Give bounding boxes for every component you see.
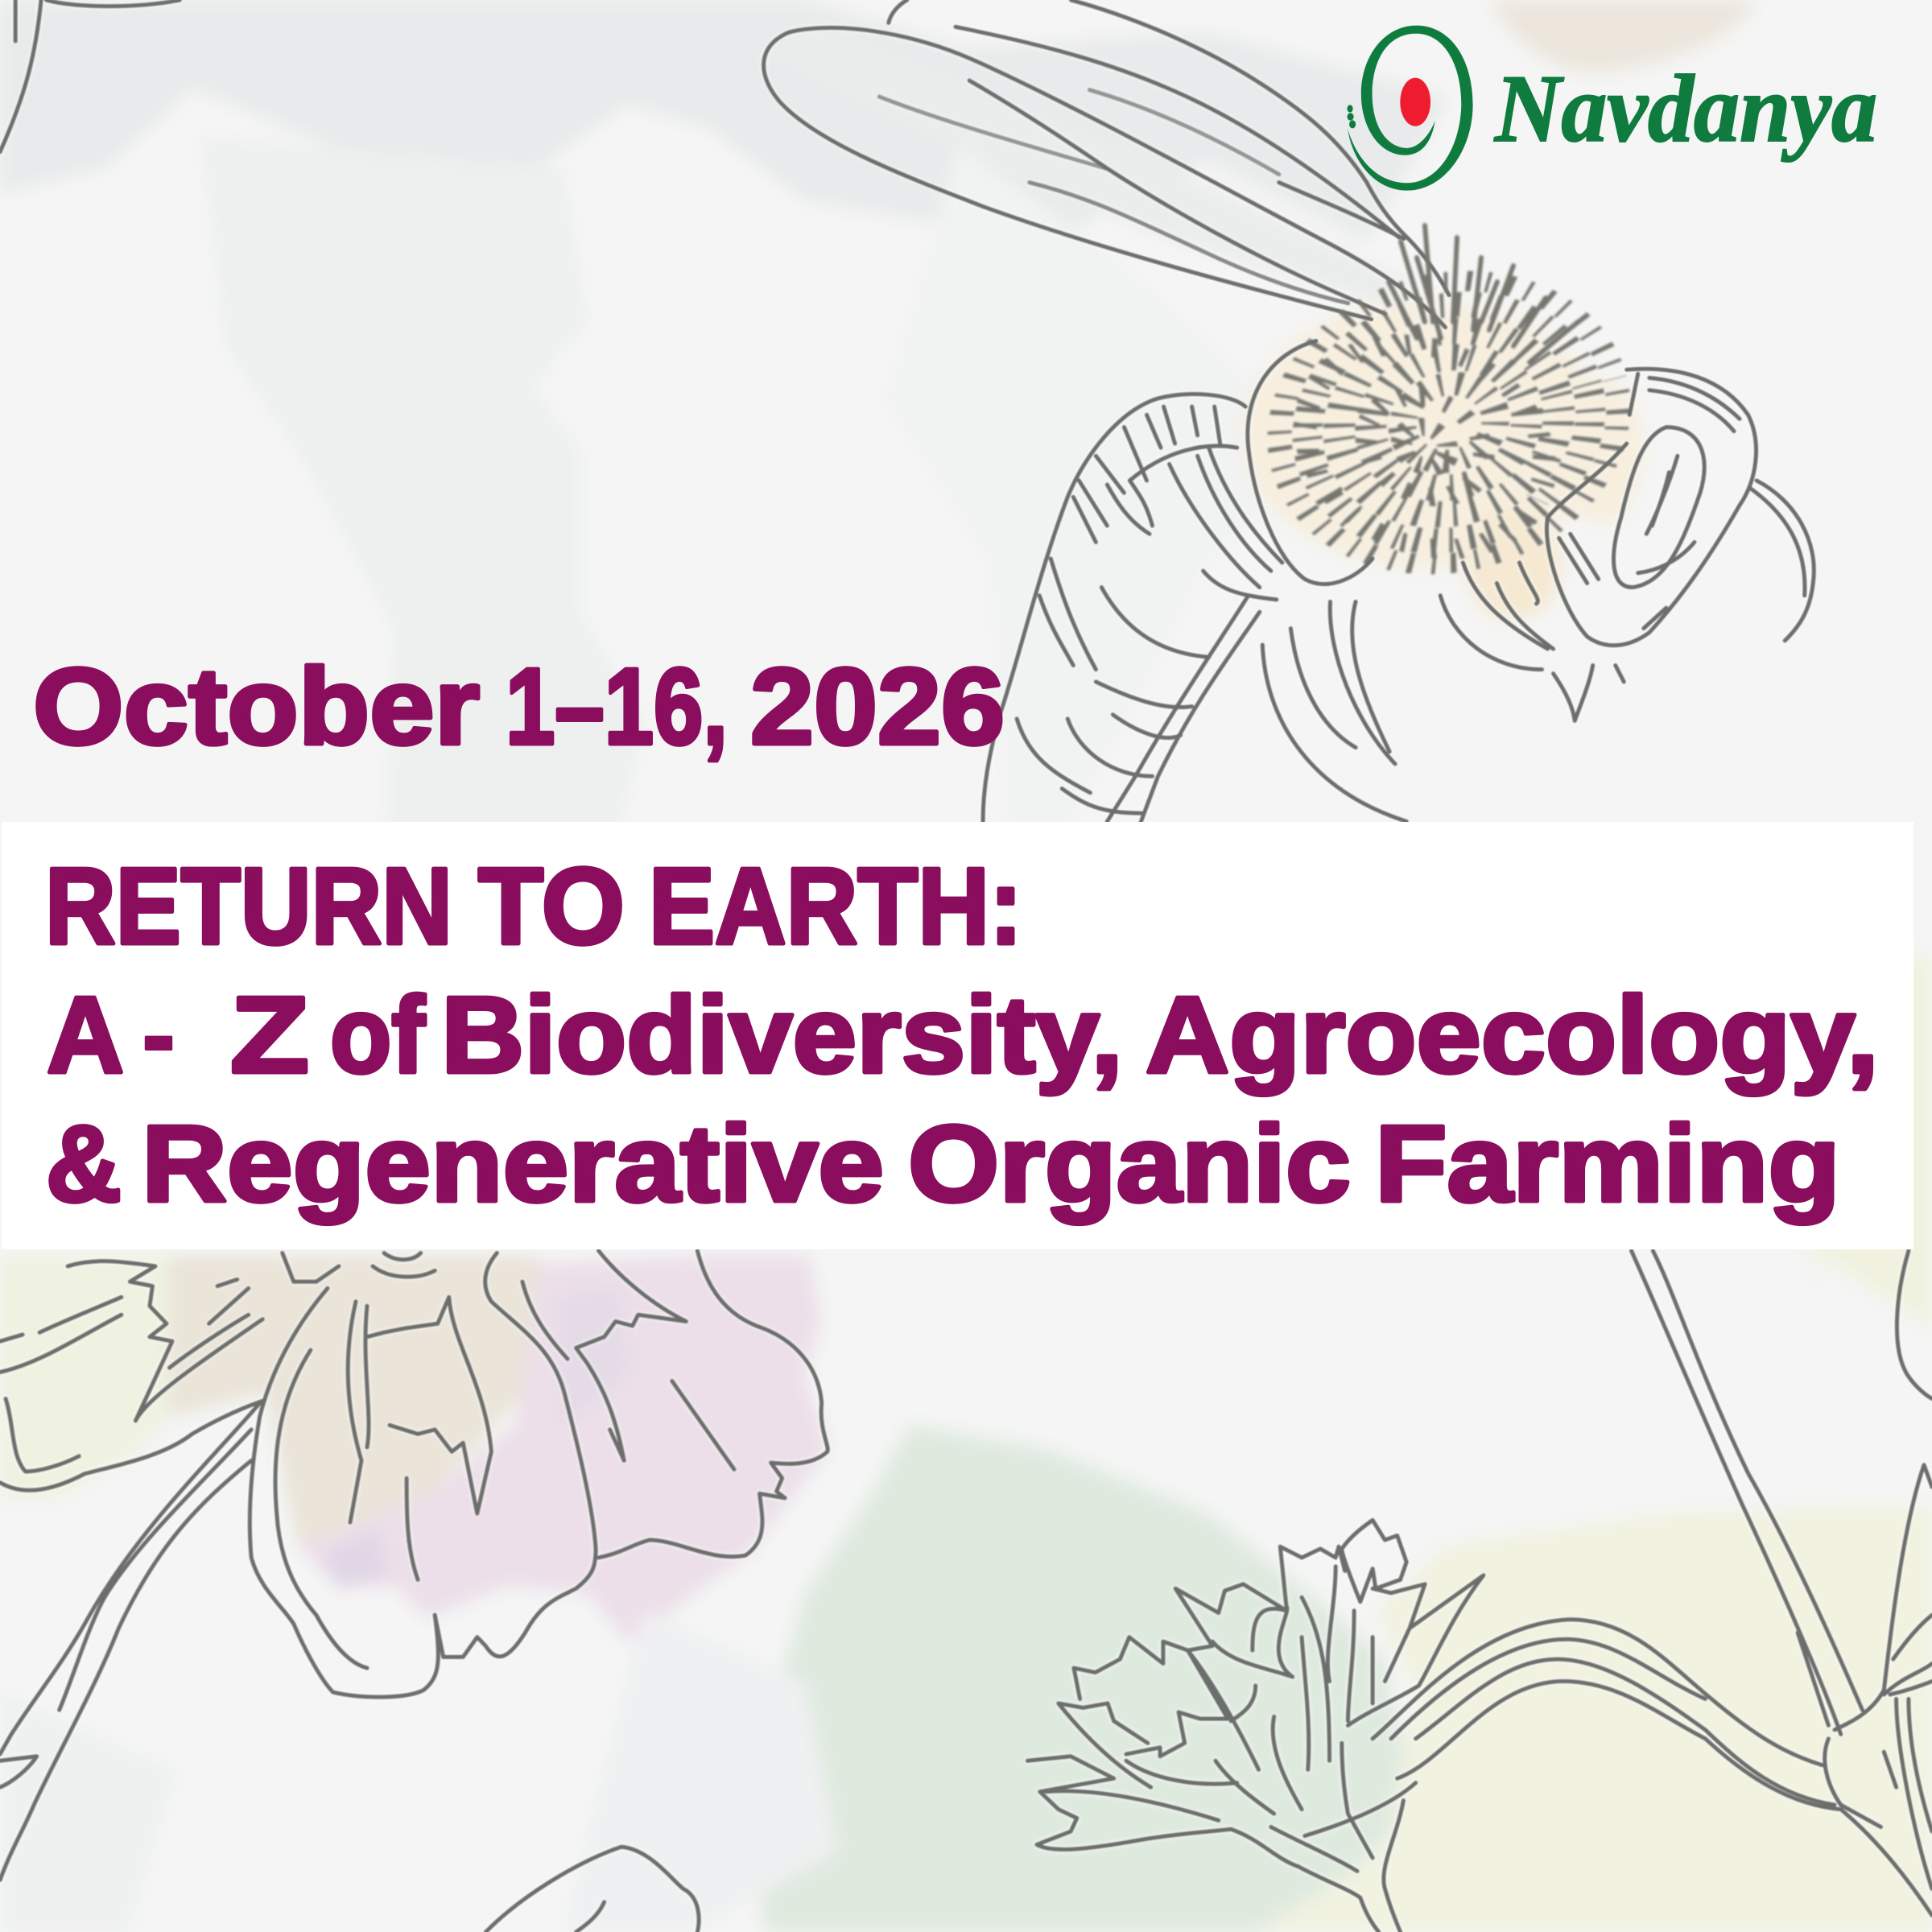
illustration: bee wings: [764, 0, 1449, 328]
logo wordmark: Navdanya: [1493, 55, 1877, 162]
title line 3: Regenerative: [142, 1103, 884, 1224]
icon: Navdanya seed ring emblem: [1347, 26, 1473, 191]
illustration: top-left corner lines: [0, 0, 180, 152]
title line 1: RETURN: [45, 845, 452, 967]
title line 3: [46, 1103, 1840, 1224]
title line 2: –: [144, 974, 173, 1096]
date heading: October: [33, 646, 480, 767]
white title band: [2, 822, 1913, 1249]
title line 2: Z: [230, 974, 309, 1096]
title line 3: Organic: [908, 1103, 1351, 1224]
title line 1: TO: [478, 845, 625, 967]
illustration: bee body and head: [983, 341, 1814, 821]
title line 2: [47, 974, 1879, 1096]
title line 3: &: [46, 1103, 122, 1224]
title line 1: [45, 845, 1022, 967]
logo: Navdanya: [1347, 26, 1877, 191]
illustration: bee thorax hairs: [1248, 225, 1650, 601]
date heading: 1–16,: [506, 646, 728, 767]
illustration: lower-right plant and flower: [1028, 1251, 1932, 1932]
title line 1: EARTH:: [649, 845, 1022, 967]
illustration: lower-left flower: [0, 1251, 828, 1932]
date heading: [33, 646, 1005, 767]
date heading: 2026: [750, 646, 1005, 767]
title line 2: of: [330, 974, 426, 1096]
title line 2: Biodiversity,: [441, 974, 1123, 1096]
title line 3: Farming: [1375, 1103, 1840, 1224]
title line 2: A: [47, 974, 124, 1096]
title line 2: Agroecology,: [1146, 974, 1879, 1096]
